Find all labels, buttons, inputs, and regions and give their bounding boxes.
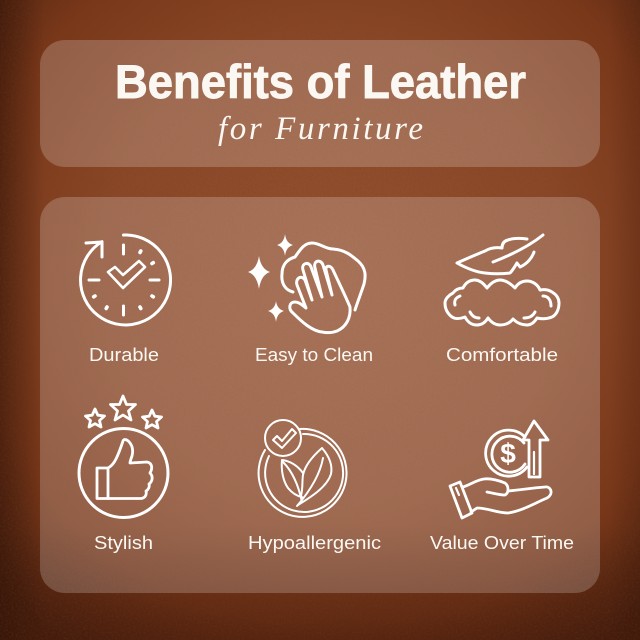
panel: benefits xyxy=(40,197,600,593)
benefit: stylish xyxy=(79,396,168,553)
benefit: durable xyxy=(81,235,171,365)
benefit: hypoallergenic xyxy=(248,420,381,553)
icon: feather over cloud xyxy=(445,235,559,325)
heading: Benefits of Leather xyxy=(115,55,526,108)
icon: clock with check xyxy=(81,235,171,325)
benefit: value over time xyxy=(430,421,574,553)
subheading: for Furniture xyxy=(218,111,423,147)
icon: hand wiping with sparkles xyxy=(248,234,365,333)
label: Value Over Time xyxy=(430,532,574,553)
label: Stylish xyxy=(94,532,153,553)
panel: title xyxy=(40,40,600,167)
label: Durable xyxy=(89,344,159,365)
icon: thumbs up with stars xyxy=(79,396,168,518)
label: Comfortable xyxy=(446,344,558,365)
icon: hand, coin and rising arrow xyxy=(450,421,551,518)
icon: leaves in circle with check badge xyxy=(259,420,347,517)
benefit: comfortable xyxy=(445,235,559,365)
benefit: easy to clean xyxy=(248,234,373,365)
label: Hypoallergenic xyxy=(248,532,381,553)
icon: hand, coin and rising arrow: $ xyxy=(500,438,516,469)
label: Easy to Clean xyxy=(255,344,373,365)
